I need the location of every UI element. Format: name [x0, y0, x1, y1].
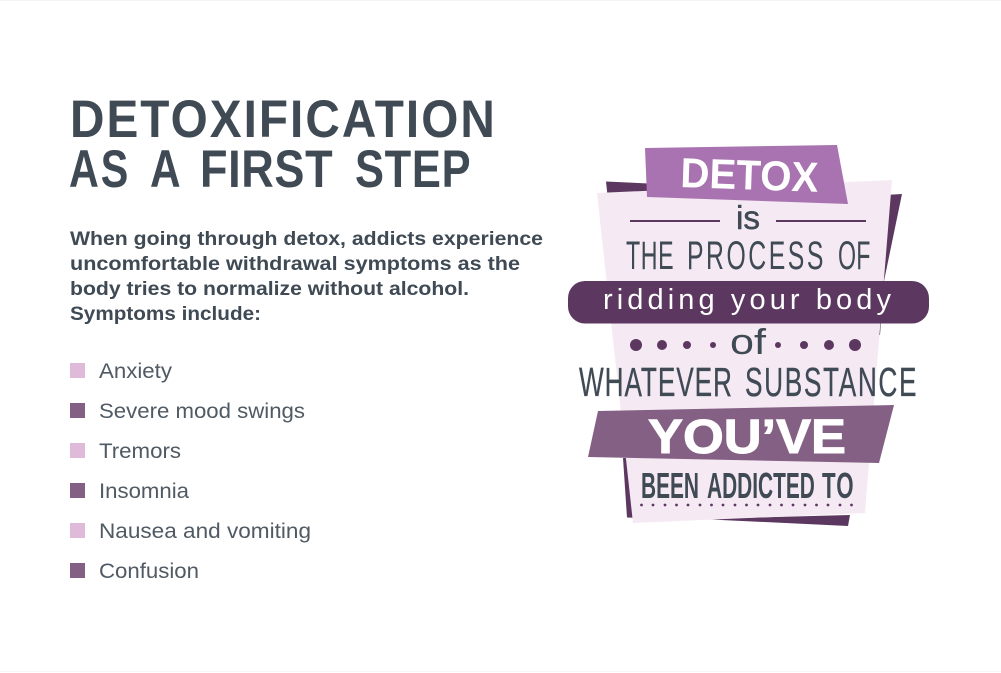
text: BEEN ADDICTED TO: ADDICTED	[707, 466, 815, 507]
text: THE PROCESS OF: THE	[626, 232, 674, 278]
typographic badge: definition of detox	[568, 145, 929, 526]
item: Tremors	[70, 440, 181, 463]
item: Anxiety	[70, 360, 173, 383]
text: BEEN ADDICTED TO: TO	[822, 467, 854, 506]
text: THE PROCESS OF: PROCESS	[687, 234, 823, 279]
dotted rule	[640, 504, 853, 506]
item: Severe mood swings: Severe mood swings	[99, 400, 305, 423]
intro paragraph: uncomfortable withdrawal symptoms as the	[70, 254, 520, 275]
word "is" with rules: is	[736, 199, 760, 236]
title: A	[150, 141, 181, 199]
text: WHATEVER SUBSTANCE: SUBSTANCE	[745, 360, 917, 406]
text: WHATEVER SUBSTANCE: WHATEVER	[579, 360, 732, 406]
title: AS	[69, 140, 128, 199]
title: DETOXIFICATION	[70, 89, 495, 149]
banner: YOU'VE	[588, 405, 894, 464]
pill: ridding your body	[568, 281, 929, 324]
text: WHATEVER SUBSTANCE	[579, 360, 917, 406]
light panel	[597, 180, 892, 523]
banner: DETOX	[645, 145, 848, 204]
symptoms list	[70, 360, 311, 583]
word "of" with dots: of	[730, 321, 767, 362]
item: Insomnia: Insomnia	[99, 480, 189, 503]
banner: YOU'VE: YOU’VE	[648, 411, 846, 464]
item: Tremors: Tremors	[99, 440, 181, 463]
item: Nausea and vomiting: Nausea and vomiting	[99, 520, 311, 543]
pill: ridding your body: ridding your body	[603, 284, 892, 316]
intro paragraph	[70, 229, 543, 325]
banner: DETOX: DETOX	[680, 149, 819, 201]
word "of" with dots	[630, 321, 861, 362]
text: THE PROCESS OF	[626, 232, 870, 279]
item: Anxiety: Anxiety	[99, 360, 173, 383]
dark backing shape	[606, 182, 902, 526]
title: STEP	[355, 140, 471, 199]
title: FIRST	[200, 140, 333, 199]
item: Confusion: Confusion	[99, 560, 199, 583]
text: BEEN ADDICTED TO: BEEN	[641, 466, 699, 507]
intro paragraph: When going through detox, addicts experience	[70, 229, 543, 250]
intro paragraph: body tries to normalize without alcohol.	[70, 279, 469, 300]
title	[69, 89, 495, 199]
intro paragraph: Symptoms include:	[70, 304, 261, 325]
text: THE PROCESS OF: OF	[838, 232, 870, 278]
text: BEEN ADDICTED TO	[641, 466, 854, 507]
